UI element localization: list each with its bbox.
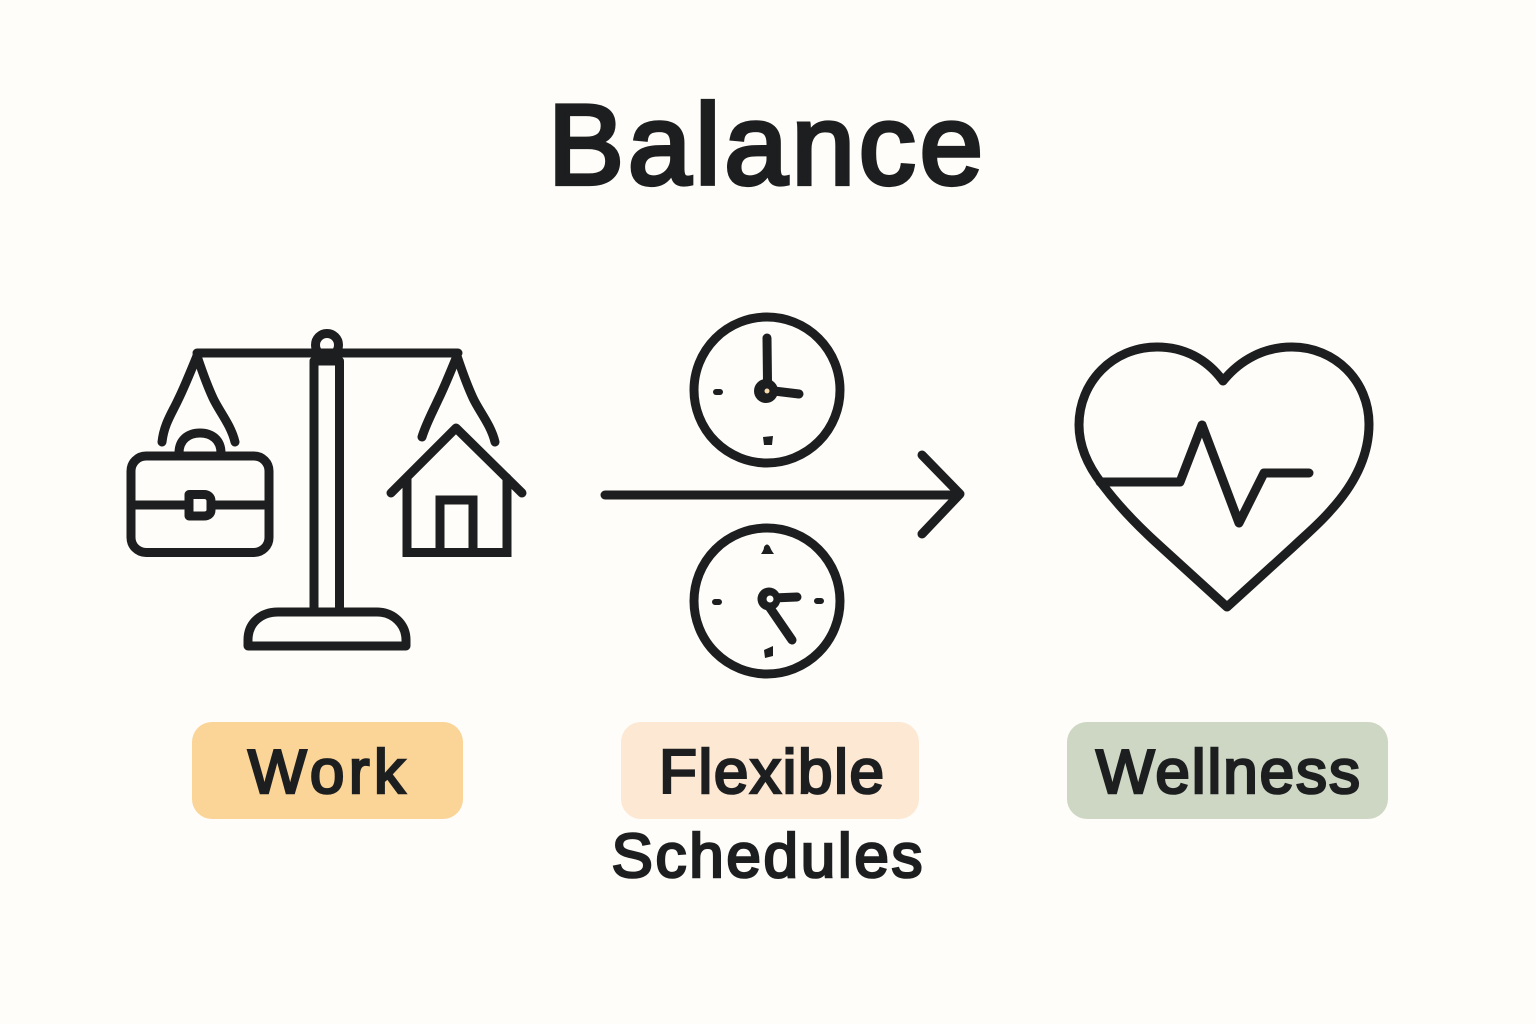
label: Flexible Schedules bbox=[612, 722, 922, 891]
label: Wellness bbox=[1067, 722, 1388, 819]
label: Flexible Schedules: Flexible bbox=[659, 738, 884, 807]
icon: house bbox=[391, 428, 522, 552]
title: Balance bbox=[548, 82, 983, 209]
label: Work bbox=[192, 722, 463, 819]
icon: bottom clock bbox=[694, 528, 840, 674]
label: Work: Work bbox=[248, 738, 406, 807]
icon: balance scale with work and home bbox=[131, 334, 522, 646]
icon: top clock bbox=[694, 317, 840, 463]
arrow bbox=[605, 455, 960, 534]
label: Flexible Schedules: Schedules bbox=[612, 822, 922, 891]
icon: heart with pulse bbox=[1079, 347, 1369, 607]
icon: briefcase bbox=[131, 433, 269, 552]
label: Wellness: Wellness bbox=[1096, 738, 1360, 807]
